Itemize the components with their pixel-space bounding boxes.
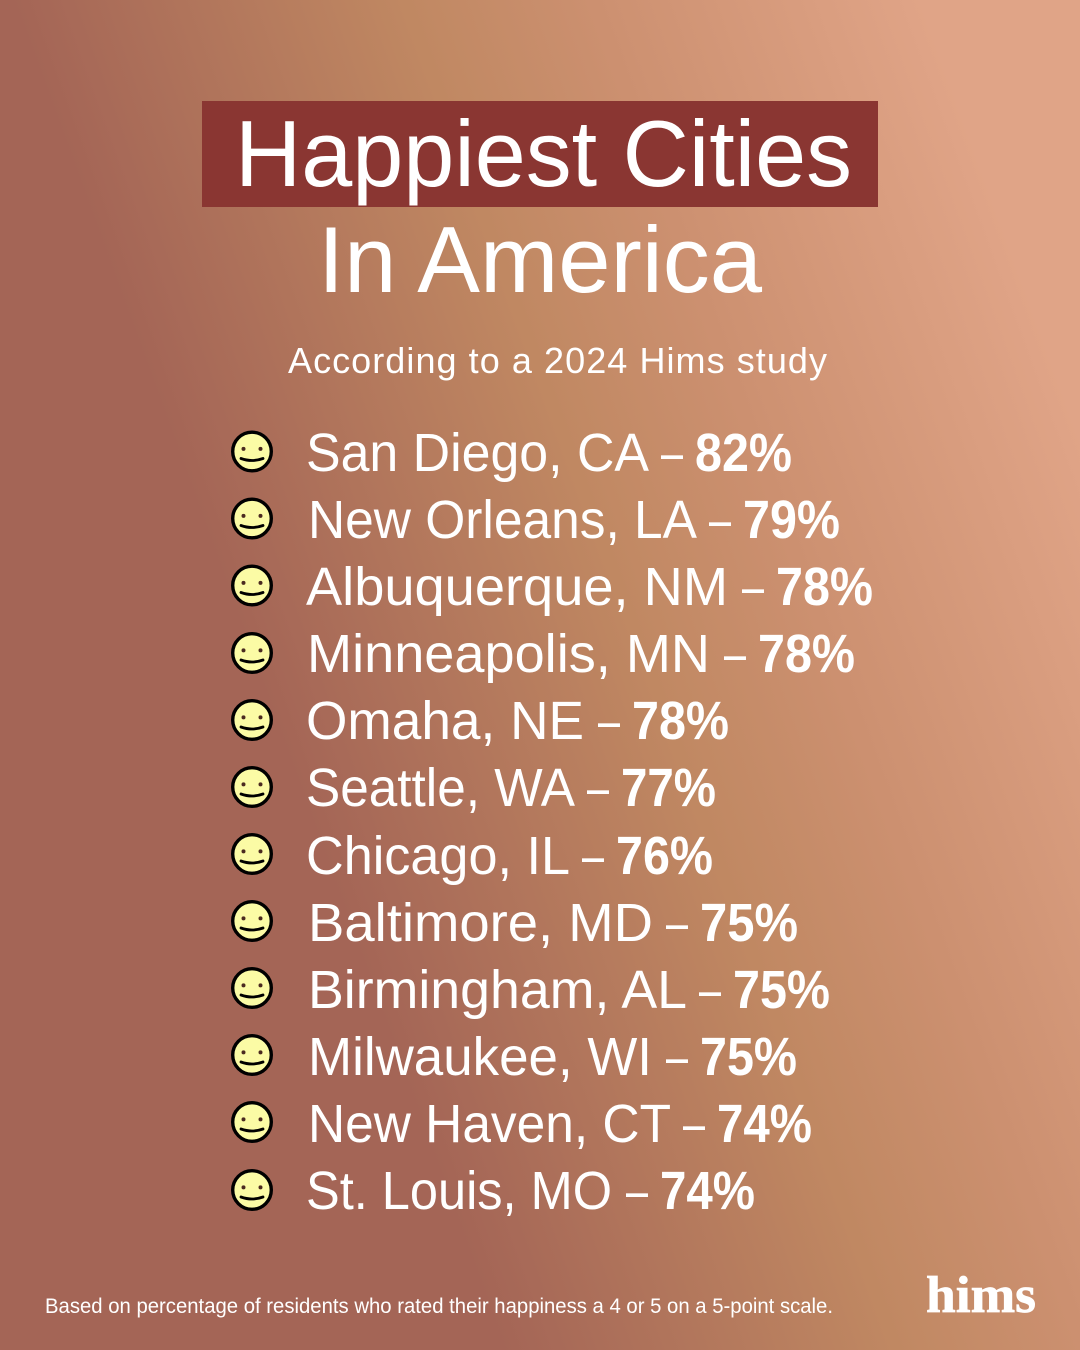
list row: New Haven: New Haven, CT	[308, 1094, 671, 1154]
title highlight box	[202, 101, 878, 207]
list row: Milwaukee: 75%	[700, 1027, 797, 1087]
list row: Chicago: Chicago, IL	[306, 826, 570, 886]
list row: Albuquerque: 78%	[776, 557, 873, 617]
list row: Omaha: –	[598, 691, 620, 751]
list row: Baltimore: –	[666, 893, 688, 953]
list row: Baltimore: 75%	[700, 893, 798, 953]
list row: Baltimore: Baltimore, MD	[308, 893, 653, 953]
subtitle: According to a 2024 Hims study	[288, 340, 827, 381]
list row: St. Louis: St. Louis, MO	[306, 1161, 612, 1221]
list row: Omaha	[233, 691, 729, 751]
list row: Minneapolis	[233, 624, 855, 684]
list row: Minneapolis: Minneapolis, MN	[307, 624, 710, 684]
list row: Birmingham	[233, 960, 830, 1020]
list row: San Diego	[233, 423, 792, 483]
title line one: Happiest Cities	[235, 101, 852, 206]
list row: Milwaukee: Milwaukee, WI	[308, 1027, 652, 1087]
list row: Omaha: 78%	[632, 691, 729, 751]
list row: Milwaukee: –	[666, 1027, 688, 1087]
list row: St. Louis: –	[626, 1161, 648, 1221]
list row: New Orleans: New Orleans, LA	[308, 490, 697, 550]
list row: Omaha: Omaha, NE	[306, 691, 584, 751]
list row: St. Louis: 74%	[660, 1161, 755, 1221]
list row: Seattle	[233, 758, 716, 818]
list row: Albuquerque	[233, 557, 873, 617]
list row: Seattle: Seattle, WA	[306, 758, 575, 818]
list row: New Haven	[233, 1094, 812, 1154]
list row: Chicago: 76%	[616, 826, 713, 886]
list row: Birmingham: Birmingham, AL	[308, 960, 687, 1020]
list row: Chicago	[233, 826, 713, 886]
list row: Albuquerque: Albuquerque, NM	[306, 557, 728, 617]
list row: New Orleans	[233, 490, 840, 550]
list row: Milwaukee	[233, 1027, 797, 1087]
logo: hims: hims	[926, 1267, 1036, 1324]
list row: Birmingham: 75%	[733, 960, 830, 1020]
list row: New Haven: 74%	[717, 1094, 812, 1154]
list row: Albuquerque: –	[742, 557, 764, 617]
title line two: In America	[318, 207, 763, 312]
list row: San Diego: San Diego, CA	[306, 423, 649, 483]
list row: Seattle: –	[587, 758, 609, 818]
list row: Baltimore	[233, 893, 798, 953]
list row: New Orleans: –	[709, 490, 731, 550]
list row: Minneapolis: –	[724, 624, 746, 684]
list row: Birmingham: –	[699, 960, 721, 1020]
list row: New Haven: –	[683, 1094, 705, 1154]
list row: San Diego: 82%	[695, 423, 792, 483]
list row: San Diego: –	[661, 423, 683, 483]
list row: Chicago: –	[582, 826, 604, 886]
list row: Minneapolis: 78%	[758, 624, 855, 684]
footnote: Based on percentage of residents who rated their happiness a 4 or 5 on a 5-point scale.	[45, 1295, 833, 1318]
list row: New Orleans: 79%	[743, 490, 840, 550]
list row: St. Louis	[233, 1161, 755, 1221]
list row: Seattle: 77%	[621, 758, 716, 818]
